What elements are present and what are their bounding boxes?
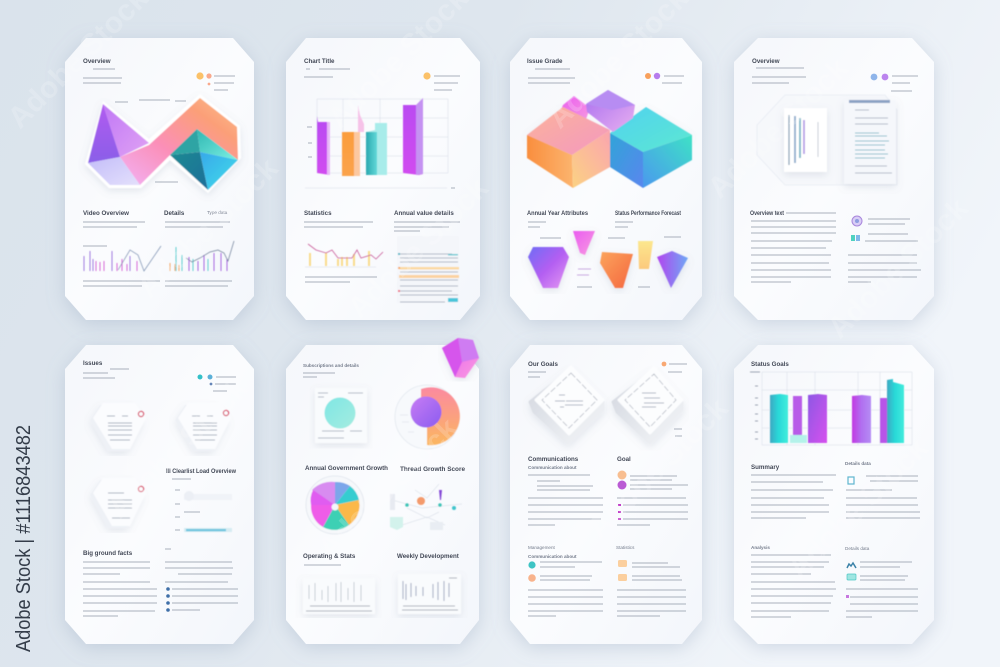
card 1 body text bbox=[83, 222, 232, 286]
card 2 section headings: Statistics bbox=[304, 210, 332, 217]
teal and violet bar chart bbox=[750, 372, 912, 445]
card 8 text bbox=[751, 475, 920, 617]
card 8 headings: Summary bbox=[751, 464, 780, 471]
card 2 title: Chart Title bbox=[304, 58, 335, 65]
card 3 section headings bbox=[527, 210, 681, 217]
watermark: Adobe Stock bbox=[312, 412, 465, 565]
card 7 title: Our Goals bbox=[528, 361, 558, 368]
card 3 icons bbox=[645, 73, 660, 79]
card 7 headings bbox=[528, 456, 635, 559]
stacked tag card 1 bbox=[90, 403, 146, 451]
card 2 small combo chart bbox=[305, 244, 383, 267]
card 8 headings: Details data bbox=[845, 546, 870, 551]
watermark: Adobe Stock bbox=[702, 52, 855, 205]
card 4 circles bbox=[871, 74, 888, 80]
card 6 headings row two: Operating & Stats bbox=[303, 553, 356, 560]
panel: card 6 charts bbox=[286, 338, 479, 644]
card 6 headings row two: Weekly Development bbox=[397, 553, 459, 560]
card 1 section headings: Type data bbox=[207, 210, 228, 215]
card 4 title: Overview bbox=[752, 58, 780, 65]
pie chart bbox=[306, 476, 364, 534]
watermark: Adobe Stock bbox=[782, 432, 935, 585]
panel: card 5 cards bbox=[65, 345, 254, 644]
card 4 teal icon bbox=[851, 235, 860, 241]
card 1 title: Overview bbox=[83, 58, 111, 65]
documents illustration bbox=[757, 95, 897, 185]
card 2 section headings: Annual value details bbox=[394, 210, 454, 217]
stock credit rotated text: Adobe Stock | #1116843482 bbox=[12, 425, 35, 652]
card 5 chart heading: III Clearlist Load Overview bbox=[166, 468, 236, 475]
card 1 intro text bbox=[83, 69, 235, 182]
card 5 teal dots bbox=[198, 374, 212, 385]
card 7 headings: Communication about bbox=[528, 465, 577, 470]
card 3 section headings: Status Performance Forecast bbox=[615, 210, 681, 217]
card 7 headings: Goal bbox=[617, 456, 631, 463]
watermark: Adobe Stock bbox=[342, 172, 495, 325]
panel: card 7 diamonds bbox=[510, 345, 702, 644]
card 1 icons bbox=[196, 72, 212, 85]
card 6 headings row two bbox=[303, 553, 459, 560]
card 6 headings row one: Thread Growth Score bbox=[400, 466, 466, 473]
mini chart right bbox=[170, 241, 234, 271]
stacked tag card 2 bbox=[175, 403, 231, 451]
panel: card 4 documents bbox=[734, 38, 934, 320]
card 5 title: Issues bbox=[83, 360, 103, 367]
card 7 headings: Communication about bbox=[528, 554, 577, 559]
card 3 title: Issue Grade bbox=[527, 58, 563, 65]
corner gem bbox=[442, 338, 479, 378]
gem shapes row bbox=[528, 231, 688, 288]
diamond 1 bbox=[530, 367, 603, 443]
card 8 headings bbox=[751, 461, 871, 551]
card 1 section headings bbox=[83, 210, 228, 217]
card 4 heading: Overview text bbox=[750, 210, 784, 217]
card 4 text bbox=[751, 68, 921, 282]
panel: card 8 teal bar chart bbox=[734, 345, 934, 644]
card 7 headings: Communications bbox=[528, 456, 579, 463]
card 6 headings row one bbox=[305, 465, 466, 473]
card 7 headings: Statistics bbox=[616, 545, 635, 550]
bottom panel right bbox=[398, 574, 461, 614]
card 2 text bbox=[304, 69, 460, 282]
polygon chart bbox=[85, 94, 241, 193]
card 6 headings row one: Annual Government Growth bbox=[305, 465, 388, 472]
mini chart left bbox=[84, 246, 161, 271]
card 2 chart axis labels bbox=[307, 127, 455, 188]
card 8 headings: Details data bbox=[845, 461, 871, 466]
card 8 icons bbox=[846, 477, 856, 598]
panel: card 2 bar chart bbox=[286, 38, 480, 320]
watermark: Adobe Stock bbox=[582, 392, 735, 545]
diamond 2 bbox=[613, 368, 682, 443]
card 5 bullets bbox=[166, 587, 170, 612]
watermark: Adobe Stock bbox=[132, 152, 285, 305]
card 2 section headings bbox=[304, 210, 454, 217]
card 3 section headings: Annual Year Attributes bbox=[527, 210, 589, 217]
card 1 section headings: Video Overview bbox=[83, 210, 129, 217]
node diagram bbox=[390, 484, 462, 530]
panel: card 3 cubes bbox=[510, 38, 702, 320]
card 8 headings: Analysis bbox=[751, 545, 770, 550]
card 7 orange icon bbox=[662, 362, 666, 366]
panel chart with circle bbox=[315, 388, 367, 443]
watermark: Adobe Stock bbox=[822, 192, 975, 345]
watermark: Adobe Stock bbox=[102, 372, 255, 525]
card 5 text bbox=[83, 369, 238, 616]
isometric cubes bbox=[527, 90, 692, 188]
card 4 purple icon bbox=[852, 216, 862, 226]
bottom panel left bbox=[303, 578, 375, 614]
stacked tag card 3 bbox=[90, 478, 146, 528]
card 7 icons bbox=[528, 470, 627, 582]
card 6 title: Subscriptions and details bbox=[303, 363, 359, 368]
card 5 section heading: Big ground facts bbox=[83, 550, 133, 557]
card 7 text bbox=[528, 364, 688, 616]
card 5 progress bars bbox=[184, 491, 232, 532]
card 2 table bbox=[397, 236, 459, 303]
card 8 title: Status Goals bbox=[751, 361, 789, 368]
card 7 headings: Management bbox=[528, 545, 556, 550]
card 2 icon bbox=[423, 72, 431, 80]
card 6 text bbox=[303, 373, 341, 565]
donut chart bbox=[395, 385, 460, 449]
panel: card 1 polygon chart bbox=[65, 38, 254, 320]
card 1 section headings: Details bbox=[164, 210, 185, 217]
card 3 text bbox=[528, 69, 684, 287]
bar chart bbox=[305, 98, 448, 188]
